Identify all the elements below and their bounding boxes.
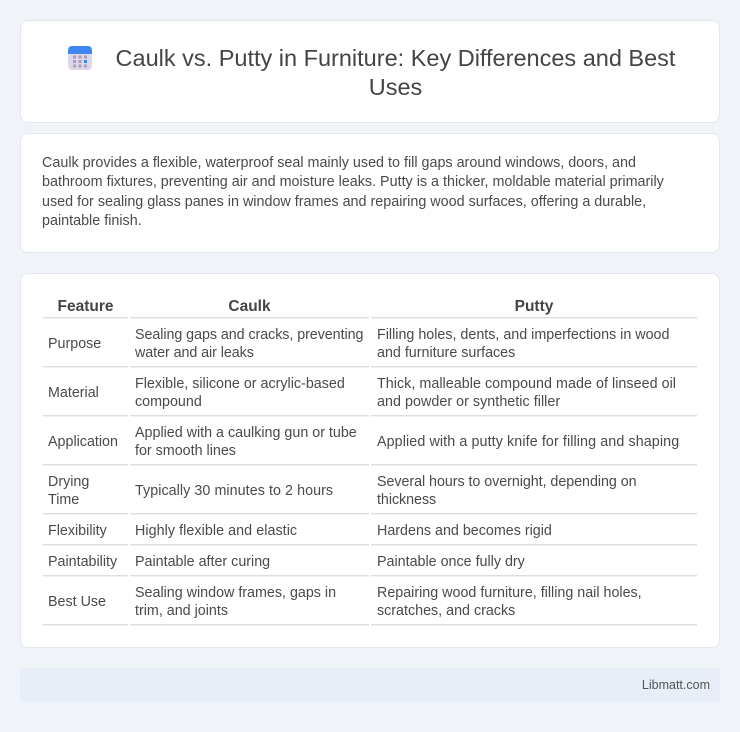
comparison table: Several hours to overnight, depending on xyxy=(377,474,636,490)
comparison table: compound xyxy=(135,394,202,410)
comparison table: Repairing wood furniture, filling nail holes, xyxy=(377,585,642,601)
comparison table: Sealing window frames, gaps in xyxy=(135,585,336,601)
row: Material: Material xyxy=(48,385,99,401)
header: Feature: Feature xyxy=(58,298,114,315)
title: Uses xyxy=(369,74,422,100)
row: Best Use: Best Use xyxy=(48,594,106,610)
title card xyxy=(20,20,720,123)
comparison table: Highly flexible and elastic xyxy=(135,523,297,539)
comparison table: scratches, and cracks xyxy=(377,603,515,619)
comparison table: Paintable once fully dry xyxy=(377,554,525,570)
comparison table: Typically 30 minutes to 2 hours xyxy=(135,483,333,499)
row: Application: Application xyxy=(48,434,118,450)
intro text xyxy=(42,155,664,229)
comparison table: Applied with a caulking gun or tube xyxy=(135,425,357,441)
row: Flexibility: Flexibility xyxy=(48,523,107,539)
comparison table: thickness xyxy=(377,492,436,508)
header: Caulk: Caulk xyxy=(228,298,271,315)
header: Putty: Putty xyxy=(515,298,553,315)
table card xyxy=(20,273,720,648)
intro text: bathroom fixtures, preventing air and moisture leaks. Putty is a thicker, moldable material primarily xyxy=(42,174,664,190)
row: Drying Time: Time xyxy=(48,492,79,508)
intro text: paintable finish. xyxy=(42,213,142,229)
title xyxy=(116,45,676,100)
footer bar xyxy=(20,668,720,702)
title: Caulk vs. Putty in Furniture: Key Differences and Best xyxy=(116,45,675,71)
comparison table: Applied with a putty knife for filling and shaping xyxy=(377,434,679,450)
intro card xyxy=(20,133,720,253)
comparison table: and furniture surfaces xyxy=(377,345,515,361)
row: Purpose: Purpose xyxy=(48,336,101,352)
footer text: Libmatt.com xyxy=(642,678,710,692)
comparison table: Sealing gaps and cracks, preventing xyxy=(135,327,363,343)
comparison table: Thick, malleable compound made of linseed oil xyxy=(377,376,676,392)
comparison table: Hardens and becomes rigid xyxy=(377,523,552,539)
row: Paintability: Paintability xyxy=(48,554,117,570)
comparison table: for smooth lines xyxy=(135,443,236,459)
comparison table: and powder or synthetic filler xyxy=(377,394,560,410)
icon: calendar xyxy=(68,46,92,70)
comparison table: water and air leaks xyxy=(135,345,254,361)
intro text: Caulk provides a flexible, waterproof seal mainly used to fill gaps around windows, doors, and xyxy=(42,155,636,171)
comparison table: trim, and joints xyxy=(135,603,228,619)
row: Drying Time: Drying xyxy=(48,474,89,490)
row: Drying Time xyxy=(48,474,89,508)
comparison table: Filling holes, dents, and imperfections in wood xyxy=(377,327,669,343)
comparison table: Flexible, silicone or acrylic-based xyxy=(135,376,345,392)
intro text: used for sealing glass panes in window frames and repairing wood surfaces, offering a durable, xyxy=(42,194,646,210)
comparison table: Paintable after curing xyxy=(135,554,270,570)
